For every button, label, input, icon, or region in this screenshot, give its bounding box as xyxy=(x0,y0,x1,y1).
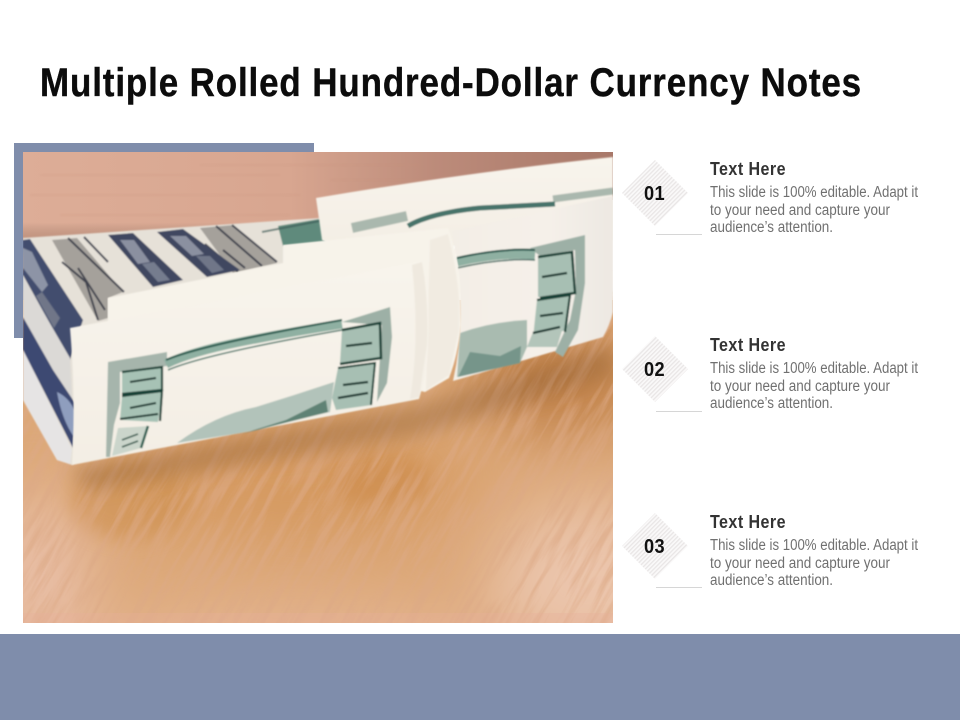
accent panel behind photo xyxy=(14,143,314,338)
printed lettering patches xyxy=(52,238,123,321)
item 01 description: This slide is 100% editable. Adapt it xyxy=(710,184,919,201)
number badge 03: 03 xyxy=(644,536,665,558)
rolled stack of notes, navy print xyxy=(23,218,330,465)
wooden table xyxy=(23,254,613,623)
number badge 03 xyxy=(622,513,688,579)
item 01 underline xyxy=(656,234,702,235)
front rolled note xyxy=(70,261,428,465)
item 03 heading: Text Here xyxy=(710,512,786,532)
item 01 xyxy=(622,159,919,236)
third navy band xyxy=(108,233,183,287)
item 03 description: This slide is 100% editable. Adapt it xyxy=(710,537,919,554)
grey strip below first band xyxy=(24,280,72,396)
photo: rolled hundred-dollar notes on a wooden table xyxy=(23,152,613,623)
footer band xyxy=(0,634,960,720)
item 03 underline xyxy=(656,587,702,588)
item 01 description xyxy=(710,184,919,236)
item 02 heading: Text Here xyxy=(710,335,786,355)
number badge 01 xyxy=(622,160,688,226)
item 01 heading: Text Here xyxy=(710,159,786,179)
back note xyxy=(316,157,613,250)
right rolled note xyxy=(452,196,613,381)
fourth navy band xyxy=(157,229,240,277)
item 01 description: audience’s attention. xyxy=(710,219,833,236)
item 02 description: to your need and capture your xyxy=(710,378,890,395)
item 03 xyxy=(622,512,919,589)
item 02 description: audience’s attention. xyxy=(710,395,833,412)
lower white strip xyxy=(23,350,72,464)
middle note xyxy=(108,228,461,392)
front note green lattice and numerals xyxy=(106,307,392,457)
item 03 description: to your need and capture your xyxy=(710,555,890,572)
item 02 description xyxy=(710,360,919,412)
item 03 description: audience’s attention. xyxy=(710,572,833,589)
wooden rolling pin backdrop xyxy=(23,152,613,240)
second navy band xyxy=(23,317,75,448)
item 02 description: This slide is 100% editable. Adapt it xyxy=(710,360,919,377)
right note green lattice and numerals xyxy=(457,235,585,377)
title: Multiple Rolled Hundred-Dollar Currency Notes xyxy=(40,61,862,105)
item 02 xyxy=(622,335,919,412)
green note end xyxy=(278,218,326,246)
number badge 02: 02 xyxy=(644,359,665,381)
number badge 02 xyxy=(622,336,688,402)
number badge 01: 01 xyxy=(644,183,665,205)
first navy band xyxy=(23,239,83,360)
item 01 description: to your need and capture your xyxy=(710,202,890,219)
item 03 description xyxy=(710,537,919,589)
item 02 underline xyxy=(656,411,702,412)
